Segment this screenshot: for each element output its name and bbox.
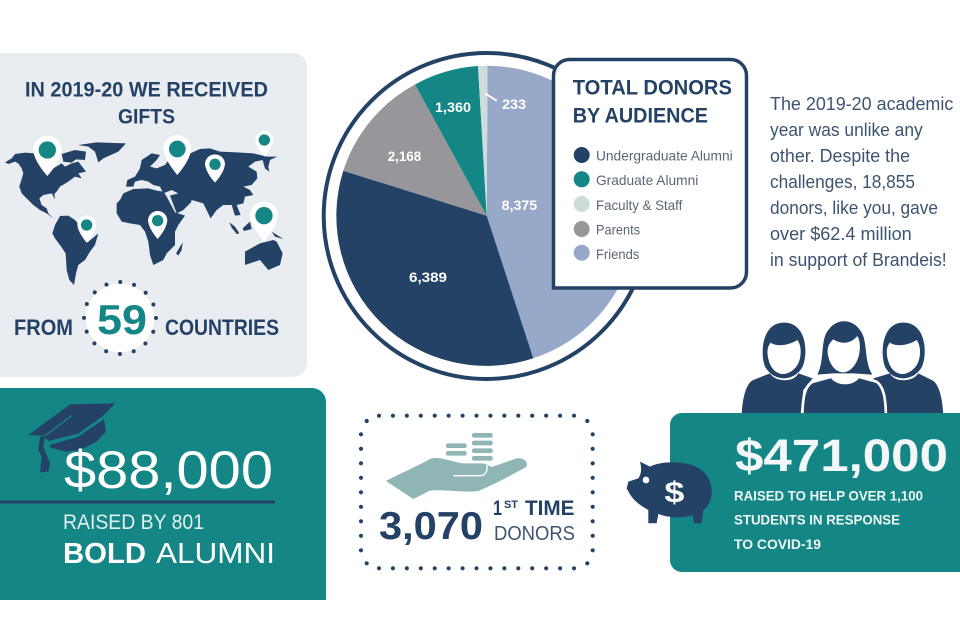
- pin: north america: [33, 136, 62, 176]
- legend title: TOTAL DONORS: [573, 75, 732, 99]
- panel: covid relief: [627, 413, 960, 572]
- legend items: Parents: [596, 221, 640, 237]
- americas: [5, 136, 126, 285]
- label: 1st time donors: ST: [504, 499, 518, 511]
- value labels: 2,168: [388, 148, 421, 164]
- pie chart: donors by audience: [324, 53, 650, 379]
- panel background: [0, 388, 326, 600]
- caption: [63, 511, 275, 570]
- leader line: [485, 93, 497, 101]
- person: right: [873, 323, 943, 420]
- caption: BOLD: [63, 538, 146, 570]
- 59 countries line: [14, 282, 279, 354]
- value labels: 1,360: [435, 99, 471, 115]
- value labels: 233: [502, 96, 526, 112]
- intro paragraph: over $62.4 million: [770, 224, 912, 244]
- chart ring: [324, 53, 650, 379]
- legend items: Graduate Alumni: [596, 172, 698, 188]
- pin: far east: [255, 131, 273, 157]
- icon: piggy bank: $: [664, 477, 684, 510]
- value labels: [388, 96, 537, 285]
- number 59: 59: [97, 296, 147, 343]
- intro paragraph: other. Despite the: [770, 146, 910, 166]
- pin: russia: [205, 154, 225, 183]
- panel: first time donors: [361, 416, 593, 568]
- icon: three people: [742, 321, 943, 420]
- legend title: BY AUDIENCE: [573, 103, 708, 127]
- pin: africa: [148, 211, 167, 239]
- slice: friends: [487, 66, 637, 358]
- heading: gifts: [25, 78, 268, 128]
- from label: FROM: [14, 315, 73, 340]
- eurasia, africa and australia: [117, 131, 283, 270]
- panel: world gifts: [0, 53, 307, 377]
- icon: graduation cap: [28, 403, 115, 472]
- amount: $471,000: [735, 430, 948, 481]
- slice: undergraduate alumni: [336, 171, 533, 366]
- caption: TO COVID-19: [734, 536, 821, 552]
- label: 1st time donors: TIME: [525, 497, 574, 520]
- pin: southeast asia: [250, 202, 278, 242]
- caption: [734, 488, 923, 552]
- value labels: 6,389: [409, 269, 447, 285]
- world map: [5, 131, 283, 285]
- legend box: [554, 60, 746, 288]
- intro paragraph: donors, like you, gave: [770, 198, 938, 218]
- legend items: Friends: [596, 246, 639, 262]
- label: 1st time donors: 1: [493, 497, 502, 520]
- panel background: [0, 53, 307, 377]
- intro paragraph: challenges, 18,855: [770, 172, 915, 192]
- heading: gifts: GIFTS: [118, 106, 175, 128]
- legend title: [573, 75, 732, 127]
- person: center: [802, 321, 886, 420]
- caption: RAISED TO HELP OVER 1,100: [734, 488, 923, 504]
- intro paragraph: in support of Brandeis!: [770, 250, 947, 270]
- number: 3,070: 3,070: [379, 505, 483, 548]
- caption: ALUMNI: [156, 538, 275, 570]
- label: 1st time donors: [493, 497, 575, 545]
- pin: europe: [163, 135, 191, 175]
- legend frame: [554, 60, 746, 288]
- divider: [0, 500, 275, 504]
- badge circle: [86, 284, 154, 352]
- icon: hand with coins: [386, 433, 527, 499]
- panel background: [670, 413, 960, 572]
- legend items: Undergraduate Alumni: [596, 148, 733, 164]
- dotted frame: [361, 416, 593, 568]
- slice: parents: [343, 84, 487, 216]
- countries label: COUNTRIES: [165, 315, 279, 340]
- intro paragraph: [770, 94, 953, 270]
- heading: gifts: IN 2019-20 WE RECEIVED: [25, 78, 268, 102]
- amount: $88,000: [64, 441, 273, 500]
- caption: RAISED BY 801: [63, 511, 204, 534]
- legend items: [574, 147, 733, 262]
- legend items: Faculty & Staff: [596, 197, 682, 213]
- person: left: [742, 323, 813, 420]
- slice: graduate alumni: [415, 66, 487, 216]
- panel: bold alumni: [0, 388, 326, 600]
- intro paragraph: year was unlike any: [770, 120, 923, 140]
- value labels: 8,375: [502, 197, 537, 213]
- intro paragraph: The 2019-20 academic: [770, 94, 953, 114]
- caption: STUDENTS IN RESPONSE: [734, 512, 900, 528]
- slice: faculty and staff: [478, 66, 488, 216]
- label: 1st time donors: DONORS: [494, 522, 575, 545]
- pin: south america: [77, 216, 96, 243]
- icon: piggy bank: [627, 462, 712, 523]
